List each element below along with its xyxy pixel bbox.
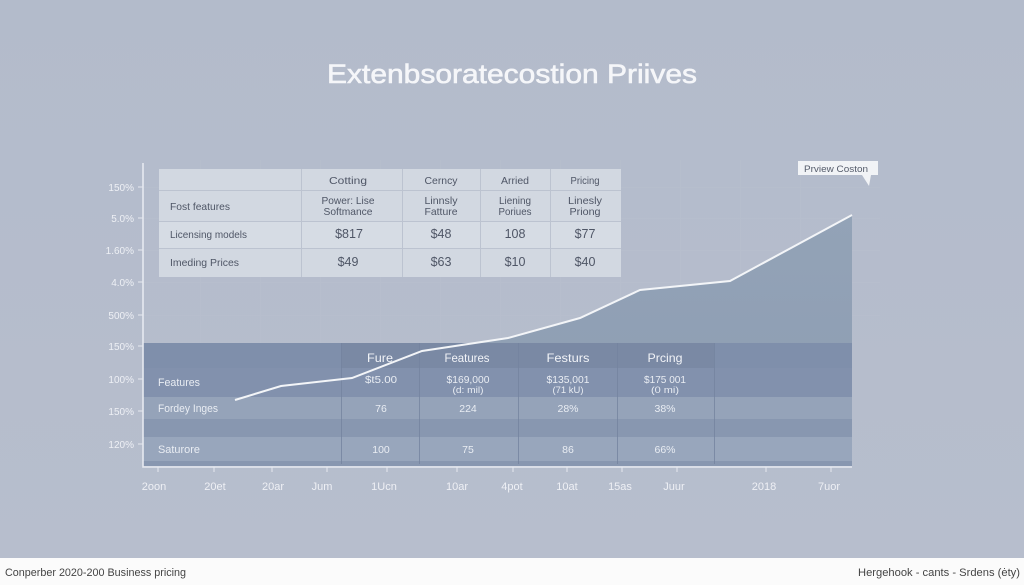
x axis labels: 2018 xyxy=(752,481,776,493)
y axis labels: 150% xyxy=(108,183,134,194)
lower table header: Prcing xyxy=(648,351,682,365)
upper table values: $817 xyxy=(335,227,363,241)
upper table header: Cerncy xyxy=(424,175,458,187)
upper table values: Fatture xyxy=(424,206,458,218)
x axis labels: 20et xyxy=(204,481,226,493)
y axis labels: 5.0% xyxy=(111,214,134,225)
upper table row labels: Imeding Prices xyxy=(170,257,239,269)
y axis labels: 120% xyxy=(108,440,134,451)
x axis labels: Juur xyxy=(663,481,685,493)
upper table values: Power: Lise xyxy=(322,195,375,207)
lower table values: $175 001 xyxy=(644,374,686,386)
x axis labels: 2oon xyxy=(142,481,166,493)
lower table row labels xyxy=(158,377,218,456)
title: Extenbsoratecostion Priives xyxy=(327,59,697,89)
panel: upper comparison table xyxy=(159,169,621,277)
callout: Prview Coston xyxy=(804,164,868,175)
upper table values: $48 xyxy=(431,227,451,241)
y axis labels xyxy=(106,183,134,451)
y axis labels: 500% xyxy=(108,311,134,322)
lower table values: 76 xyxy=(375,403,387,415)
lower table values: (0 mi) xyxy=(651,385,679,395)
lower table row labels: Saturore xyxy=(158,444,200,456)
upper table values: $10 xyxy=(505,255,525,269)
y axis labels: 150% xyxy=(108,407,134,418)
upper table header: Cotting xyxy=(329,175,367,187)
upper table header: Pricing xyxy=(570,175,600,187)
callout xyxy=(798,161,878,186)
lower table values: 66% xyxy=(654,444,676,456)
upper table values: 108 xyxy=(505,227,525,241)
upper table values: Softmance xyxy=(324,206,373,218)
lower table values: $169,000 xyxy=(446,374,490,386)
upper table row labels: Licensing models xyxy=(170,229,247,241)
lower table header: Festurs xyxy=(546,351,590,365)
upper table values: Priong xyxy=(570,206,601,218)
lower table row labels: Features xyxy=(158,377,200,389)
upper table values: Linesly xyxy=(568,195,603,207)
x axis labels: 15as xyxy=(608,481,632,493)
footer right text: Hergehook - cants - Srdens (ėty) xyxy=(858,567,1020,579)
upper table values: $77 xyxy=(575,227,595,241)
x axis labels xyxy=(142,481,840,493)
footer bar xyxy=(0,558,1024,585)
y axis labels: 4.0% xyxy=(111,278,134,289)
lower table values: 224 xyxy=(459,403,477,415)
footer left text: Conperber 2020-200 Business pricing xyxy=(5,567,186,579)
x axis xyxy=(142,467,840,493)
upper table values: Linnsly xyxy=(424,195,458,207)
y axis labels: 150% xyxy=(108,342,134,353)
upper table values xyxy=(322,195,603,269)
upper table values: $49 xyxy=(338,255,358,269)
y axis labels: 100% xyxy=(108,375,134,386)
x axis labels: 10at xyxy=(556,481,578,493)
y axis labels: 1.60% xyxy=(106,246,134,257)
upper table row labels: Fost features xyxy=(170,201,230,213)
lower table header xyxy=(367,351,682,365)
panel: lower data table xyxy=(143,343,852,466)
lower table values: (d: mil) xyxy=(452,385,484,395)
x axis labels: 7uor xyxy=(818,481,840,493)
upper table row labels xyxy=(170,201,247,269)
area under line xyxy=(235,215,852,466)
lower table values xyxy=(365,374,686,456)
lower table values: $t5.00 xyxy=(365,374,397,386)
upper table values: $63 xyxy=(431,255,451,269)
lower table values: $135,001 xyxy=(546,374,590,386)
lower table values: 100 xyxy=(372,444,390,456)
upper table values: $40 xyxy=(575,255,595,269)
x axis labels: 1Ucn xyxy=(371,481,397,493)
x axis labels: Jum xyxy=(312,481,332,493)
lower table values: (71 kU) xyxy=(552,385,584,395)
lower table header: Features xyxy=(444,351,490,365)
y axis xyxy=(106,163,852,467)
line chart series xyxy=(235,215,852,400)
lower table values: 75 xyxy=(462,444,474,456)
x axis labels: 20ar xyxy=(262,481,284,493)
upper table header: Arried xyxy=(501,175,529,187)
x axis labels: 10ar xyxy=(446,481,468,493)
upper table values: Poriues xyxy=(498,206,532,218)
lower table values: 28% xyxy=(557,403,579,415)
lower table header: Fure xyxy=(367,351,393,365)
lower table values: 38% xyxy=(654,403,676,415)
upper table values: Liening xyxy=(499,195,531,207)
x axis labels: 4pot xyxy=(501,481,523,493)
lower table values: 86 xyxy=(562,444,574,456)
lower table row labels: Fordey Inges xyxy=(158,403,218,415)
upper table header xyxy=(329,175,600,187)
